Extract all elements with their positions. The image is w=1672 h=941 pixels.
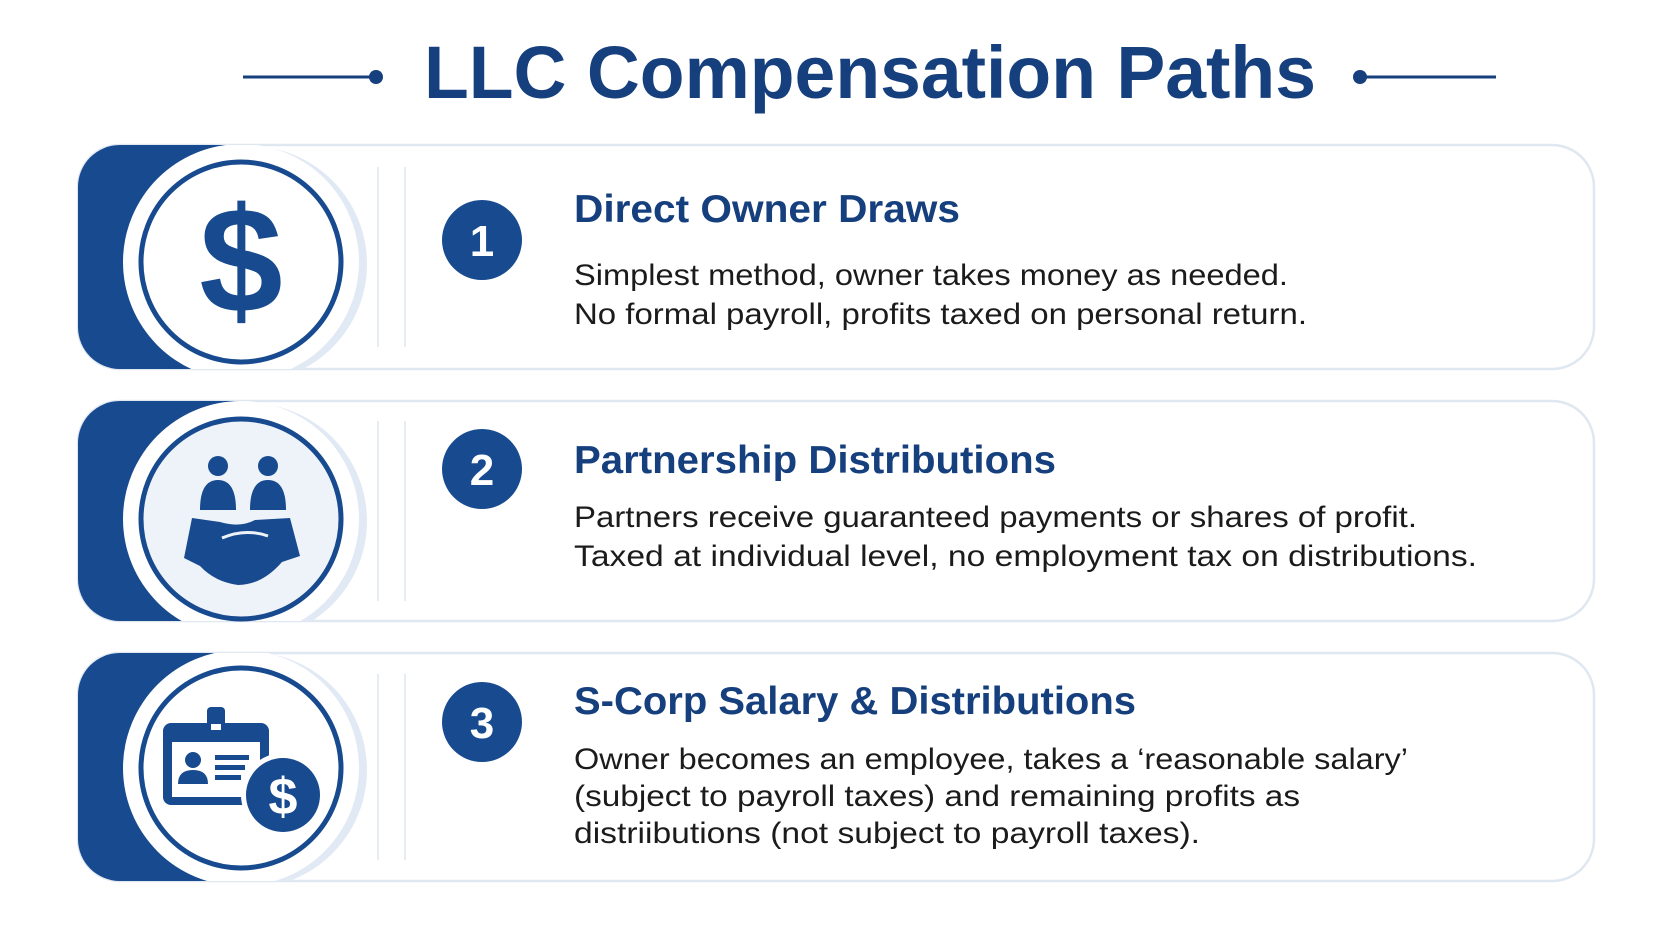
- number badge 2: [442, 429, 522, 509]
- body text 3: (subject to payroll taxes) and remaining profits as: [574, 780, 1300, 813]
- icon: ID badge with dollar: $: [269, 768, 298, 826]
- body text 2: Taxed at individual level, no employment tax on distributions.: [574, 540, 1477, 573]
- number badge 1: [442, 200, 522, 280]
- number badge 3: 3: [470, 699, 494, 748]
- number badge 1: 1: [470, 217, 494, 266]
- body text 3: distriibutions (not subject to payroll taxes).: [574, 817, 1200, 850]
- panel: partnership distributions: [78, 401, 1594, 639]
- icon: dollar sign: $: [199, 176, 283, 344]
- number badge 2: 2: [470, 446, 494, 495]
- panel: s-corp salary: [78, 650, 1594, 888]
- body text 3: Owner becomes an employee, takes a ‘reasonable salary’: [574, 743, 1408, 776]
- number badge 3: [442, 682, 522, 762]
- title: LLC Compensation Paths: [424, 31, 1316, 114]
- body text 1: No formal payroll, profits taxed on personal return.: [574, 298, 1307, 331]
- heading: Direct Owner Draws: Direct Owner Draws: [574, 188, 960, 231]
- panel: direct owner draws: [78, 144, 1594, 382]
- heading: S-Corp Salary & Distributions: S-Corp Salary & Distributions: [574, 680, 1136, 723]
- body text 2: Partners receive guaranteed payments or shares of profit.: [574, 501, 1417, 534]
- icon: ID badge with dollar: [141, 668, 341, 868]
- icon: dollar sign: [141, 162, 341, 362]
- body text 1: Simplest method, owner takes money as needed.: [574, 259, 1288, 292]
- icon: handshake with partners: [141, 419, 341, 619]
- heading: Partnership Distributions: Partnership Distributions: [574, 439, 1056, 482]
